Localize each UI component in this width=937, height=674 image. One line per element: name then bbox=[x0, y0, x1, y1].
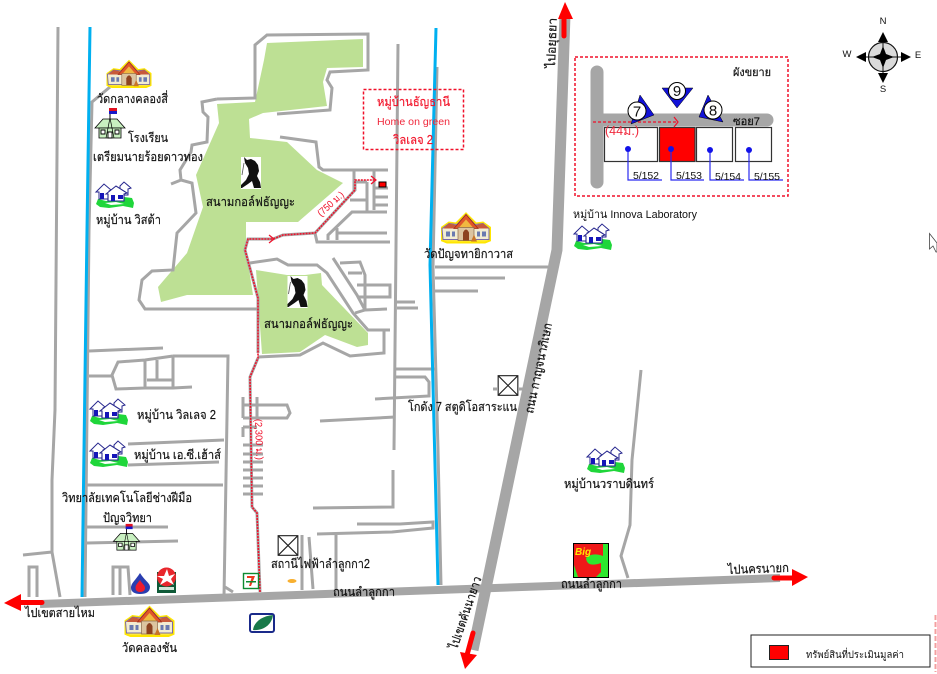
label: school: โรงเรียน bbox=[128, 130, 168, 145]
photo marker 9 bbox=[662, 82, 693, 108]
icon: PTT bbox=[131, 573, 150, 594]
main road: ถนนลำลูกกา bbox=[40, 578, 780, 604]
callout: village name bbox=[364, 90, 464, 150]
icon: temple Khlong Chan bbox=[126, 607, 174, 636]
canals bbox=[82, 27, 438, 597]
label: to Sai Mai: ไปเขตสายไหม bbox=[24, 606, 95, 620]
icon: Bangchak bbox=[250, 614, 274, 632]
photo marker 9: 9 bbox=[673, 83, 681, 100]
label: temple Khlong Chan: วัดคลองชัน bbox=[122, 641, 177, 655]
legend swatch bbox=[770, 646, 788, 660]
label: warehouse: โกดัง 7 สตูดิโอสาระแน bbox=[408, 399, 517, 415]
label: temple Panyathayikawat: วัดปัญจทายิกาวาส bbox=[424, 247, 513, 261]
label: 2300 m: (2,300 ม.) bbox=[252, 419, 264, 460]
callout: village name: วิลเลจ 2 bbox=[393, 133, 433, 147]
inset distance text: (44ม.) bbox=[605, 124, 639, 138]
icon: house Village 2 bbox=[90, 399, 128, 425]
lot numbers bbox=[633, 170, 780, 183]
route dotted line bbox=[245, 176, 376, 592]
icon: temple Klang Khlong Si bbox=[107, 61, 151, 87]
label: Warabodin village: หมู่บ้านวราบดินทร์ bbox=[564, 477, 654, 492]
icon: house Vista bbox=[96, 182, 134, 208]
icon: college bbox=[113, 524, 140, 550]
label: Vista village: หมู่บ้าน วิสต้า bbox=[96, 213, 161, 228]
lot dots bbox=[625, 146, 752, 153]
icon: house Innova bbox=[574, 224, 612, 250]
icon: compass: W bbox=[843, 49, 852, 60]
road label: soi 7: ซอย7 bbox=[733, 116, 760, 128]
label: golf course upper: สนามกอล์ฟธัญญะ bbox=[206, 195, 295, 209]
label: Kanchanaphisek road: ถนน กาญจนาภิเษก bbox=[522, 322, 555, 415]
local road network bbox=[23, 27, 641, 597]
icon: compass: E bbox=[915, 50, 921, 61]
icon: golfer upper bbox=[241, 157, 261, 189]
golf course lower green bbox=[256, 270, 368, 354]
label: Innova village: หมู่บ้าน Innova Laboratory bbox=[573, 209, 697, 221]
heading: expansion plan: ผังขยาย bbox=[733, 67, 771, 79]
icon: golfer lower bbox=[288, 276, 308, 308]
photo marker 7 bbox=[628, 95, 654, 124]
label: temple Klang Khlong Si: วัดกลางคลองสี่ bbox=[97, 90, 168, 106]
label: Lam Luk Ka road east: ถนนลำลูกกา bbox=[561, 577, 622, 592]
label: to Ayutthaya: ไปอยุธยา bbox=[544, 18, 561, 69]
icon: house AC House bbox=[90, 441, 128, 467]
inset roads bbox=[597, 72, 767, 182]
icon: Big C bbox=[574, 544, 608, 578]
arrow: north to top bbox=[558, 2, 573, 36]
icon: 7-Eleven bbox=[244, 574, 258, 588]
label: to Khan Na Yao: ไปเขตคันนายาว bbox=[446, 575, 485, 652]
arrow: south bbox=[460, 633, 477, 669]
legend text: ทรัพย์สินที่ประเมินมูลค่า bbox=[806, 647, 904, 661]
main road: ถนนกาญจนาภิเษก bbox=[473, 15, 565, 650]
label: Village 2: หมู่บ้าน วิลเลจ 2 bbox=[137, 408, 216, 423]
icon: substation box bbox=[278, 536, 298, 555]
photo marker 8 bbox=[699, 95, 723, 122]
golf course upper green bbox=[158, 39, 363, 302]
icon: warehouse box bbox=[498, 376, 518, 395]
arrow: east bbox=[774, 569, 808, 586]
site marker bbox=[379, 182, 386, 187]
icon: small gas marker bbox=[288, 579, 296, 583]
label: college name: ปัญจวิทยา bbox=[103, 511, 152, 525]
icon: Caltex bbox=[157, 568, 176, 593]
icon: cursor bbox=[930, 234, 937, 252]
label: to Nakhon Nayok: ไปนครนายก bbox=[727, 561, 789, 577]
icon: compass bbox=[843, 16, 921, 95]
icon: house Warabodin bbox=[587, 447, 625, 473]
label: 750 m: (750 ม.) bbox=[316, 190, 347, 219]
legend bbox=[751, 635, 930, 667]
lot numbers: 5/155 bbox=[754, 171, 780, 183]
icon: school bbox=[95, 108, 125, 138]
lots bbox=[604, 128, 772, 162]
arrow: west bbox=[4, 594, 42, 611]
callout: village name: Home on green bbox=[377, 116, 450, 128]
lot numbers: 5/154 bbox=[715, 171, 741, 183]
photo marker 8: 8 bbox=[709, 102, 717, 120]
lot numbers: 5/152 bbox=[633, 170, 659, 182]
label: college: วิทยาลัยเทคโนโลยีช่างฝีมือ bbox=[62, 490, 192, 505]
icon: temple Panyathayikawat bbox=[442, 214, 490, 242]
photo marker 7: 7 bbox=[633, 104, 641, 120]
lot numbers: 5/153 bbox=[676, 170, 702, 182]
label: Lam Luk Ka road centre: ถนนลำลูกกา bbox=[333, 585, 395, 600]
callout: village name: หมู่บ้านธัญธานี bbox=[377, 95, 450, 110]
label: substation: สถานีไฟฟ้าลำลูกกา2 bbox=[271, 557, 370, 572]
label: AC House: หมู่บ้าน เอ.ซี.เฮ้าส์ bbox=[134, 448, 221, 463]
lot callout lines bbox=[628, 149, 783, 180]
label: school name: เตรียมนายร้อยดาวทอง bbox=[93, 150, 203, 164]
inset distance arrow bbox=[593, 117, 678, 127]
label: golf course lower: สนามกอล์ฟธัญญะ bbox=[264, 317, 353, 331]
icon: Big C: Big bbox=[575, 547, 591, 558]
panel: site plan inset bbox=[575, 57, 788, 196]
icon: compass: S bbox=[880, 84, 886, 95]
icon: compass: N bbox=[880, 16, 887, 27]
